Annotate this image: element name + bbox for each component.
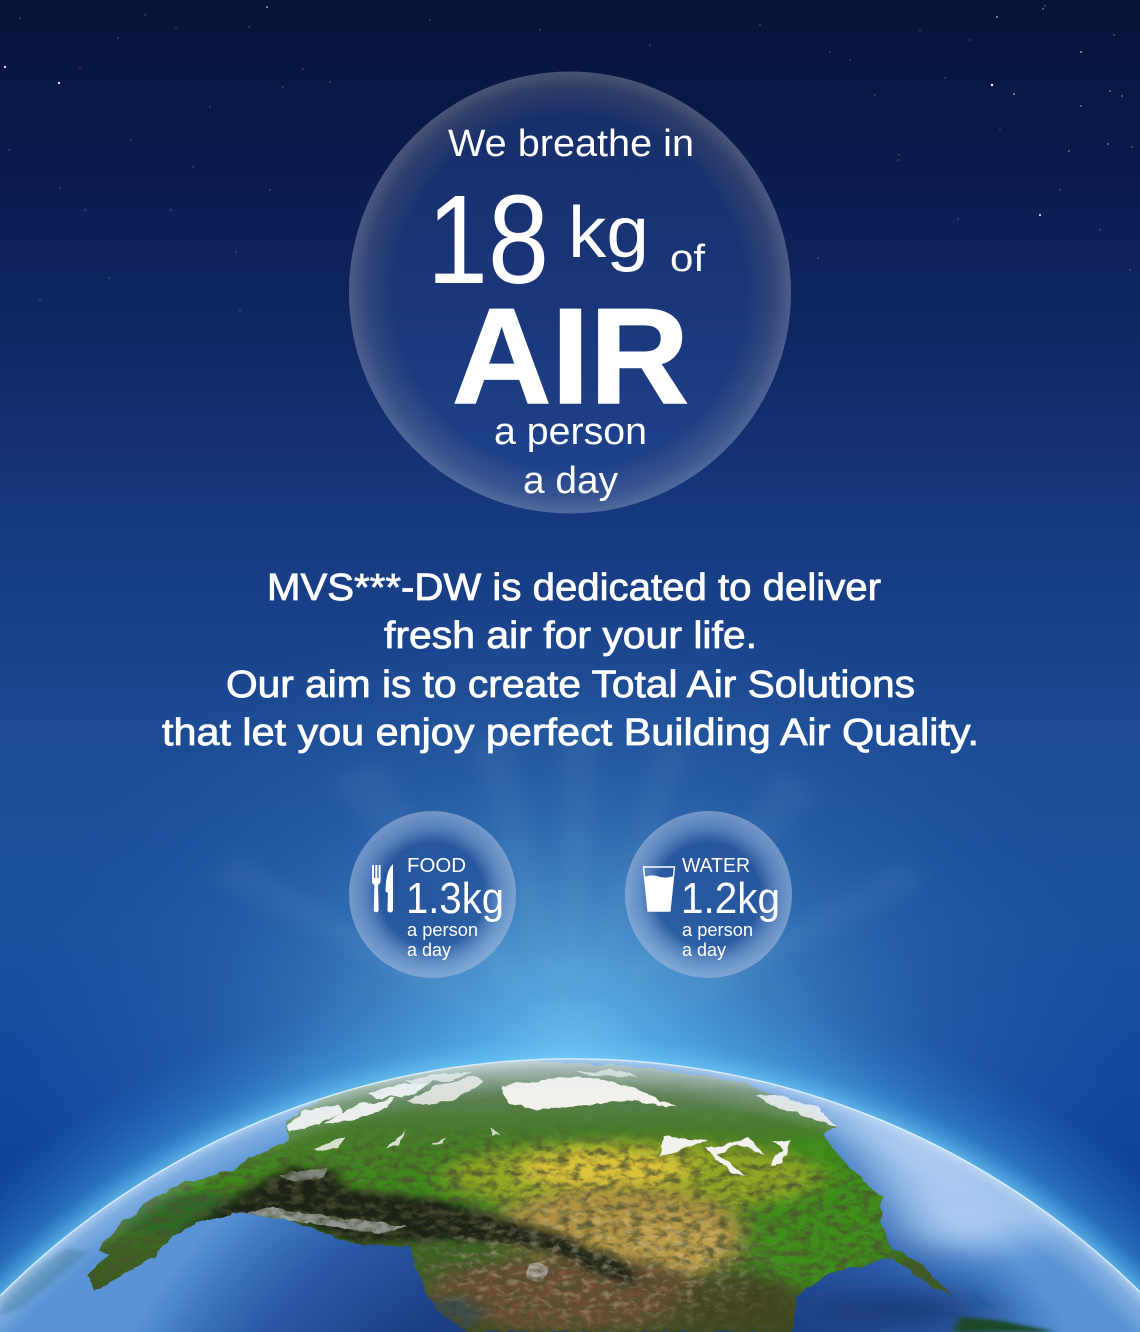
text a day: a day bbox=[407, 940, 451, 960]
icon: fork and knife bbox=[372, 864, 393, 912]
mission statement text: that let you enjoy perfect Building Air Quality. bbox=[162, 712, 979, 754]
label WATER: WATER bbox=[682, 854, 750, 877]
background: stars bbox=[4, 6, 1132, 311]
text a day: a day bbox=[523, 460, 618, 502]
word of: of bbox=[670, 238, 705, 280]
earth: terrain highlights bbox=[429, 1200, 764, 1327]
value 1.2kg: 1.2kg bbox=[681, 874, 780, 923]
earth: terrain texture bbox=[58, 1133, 989, 1332]
mission statement text: MVS***-DW is dedicated to deliver bbox=[267, 567, 881, 609]
panel: food bubble bbox=[349, 811, 516, 978]
text a person: a person bbox=[682, 920, 753, 940]
panel: main air bubble bbox=[349, 72, 791, 514]
big number 18: 18 bbox=[427, 169, 549, 310]
text a person: a person bbox=[494, 411, 647, 453]
panel: water bubble bbox=[625, 811, 792, 978]
earth: sunlit ocean haze on the east bbox=[807, 1090, 1055, 1327]
background: light rays bbox=[210, 720, 930, 1060]
value 1.3kg: 1.3kg bbox=[406, 874, 504, 923]
earth: atmospheric haze at the limb bbox=[0, 1058, 1140, 1332]
label FOOD: FOOD bbox=[407, 854, 466, 877]
earth: limb line bbox=[0, 1058, 1140, 1295]
earth: horizon halo bbox=[0, 960, 1140, 1332]
icon: glass of water bbox=[644, 867, 674, 911]
unit kg: kg bbox=[568, 193, 649, 273]
mission statement text: fresh air for your life. bbox=[384, 615, 757, 657]
earth: siberia, caribbean and south america bbox=[0, 1248, 1055, 1332]
mission statement text: Our aim is to create Total Air Solutions bbox=[226, 664, 915, 706]
intro text: We breathe in bbox=[448, 123, 694, 165]
earth: north america bbox=[58, 1057, 989, 1332]
background: atmospheric glow bbox=[0, 400, 1140, 1332]
earth: ocean bbox=[0, 1040, 1140, 1332]
text a day: a day bbox=[682, 940, 726, 960]
earth: hudson bay and arctic ice bbox=[287, 1070, 836, 1177]
earth globe bbox=[0, 1040, 1140, 1332]
text a person: a person bbox=[407, 920, 478, 940]
mission statement text bbox=[162, 567, 979, 754]
heading AIR: AIR bbox=[452, 280, 689, 432]
